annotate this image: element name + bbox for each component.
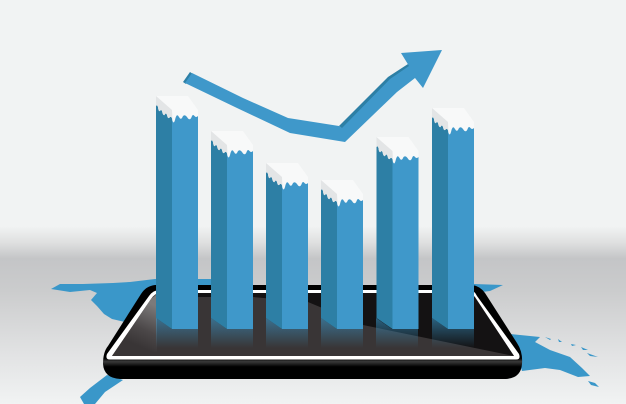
bar 5 [376,137,418,329]
map: right landmass top [474,284,503,293]
map: South America [80,375,123,404]
smartphone [103,285,522,379]
bar 1 [156,96,198,329]
bar 6 [432,108,474,329]
arrow face [185,50,442,142]
map: small islands [545,337,598,357]
bar 2 [211,131,253,329]
phone white outline [106,290,520,360]
dark screen reflection [198,293,514,356]
phone screen [112,293,514,356]
arrow dark edge [183,64,410,129]
screen glare [112,294,157,356]
arrow: upward trend [183,50,442,142]
phone body [103,285,522,379]
map: island [588,381,599,387]
bar chart [156,96,474,329]
map: Asia and Oceania [510,334,590,377]
world map [51,279,599,404]
bar reflections [156,318,474,348]
bar 3 [266,163,308,329]
map: North America [51,279,212,322]
bar 4 [321,180,363,329]
